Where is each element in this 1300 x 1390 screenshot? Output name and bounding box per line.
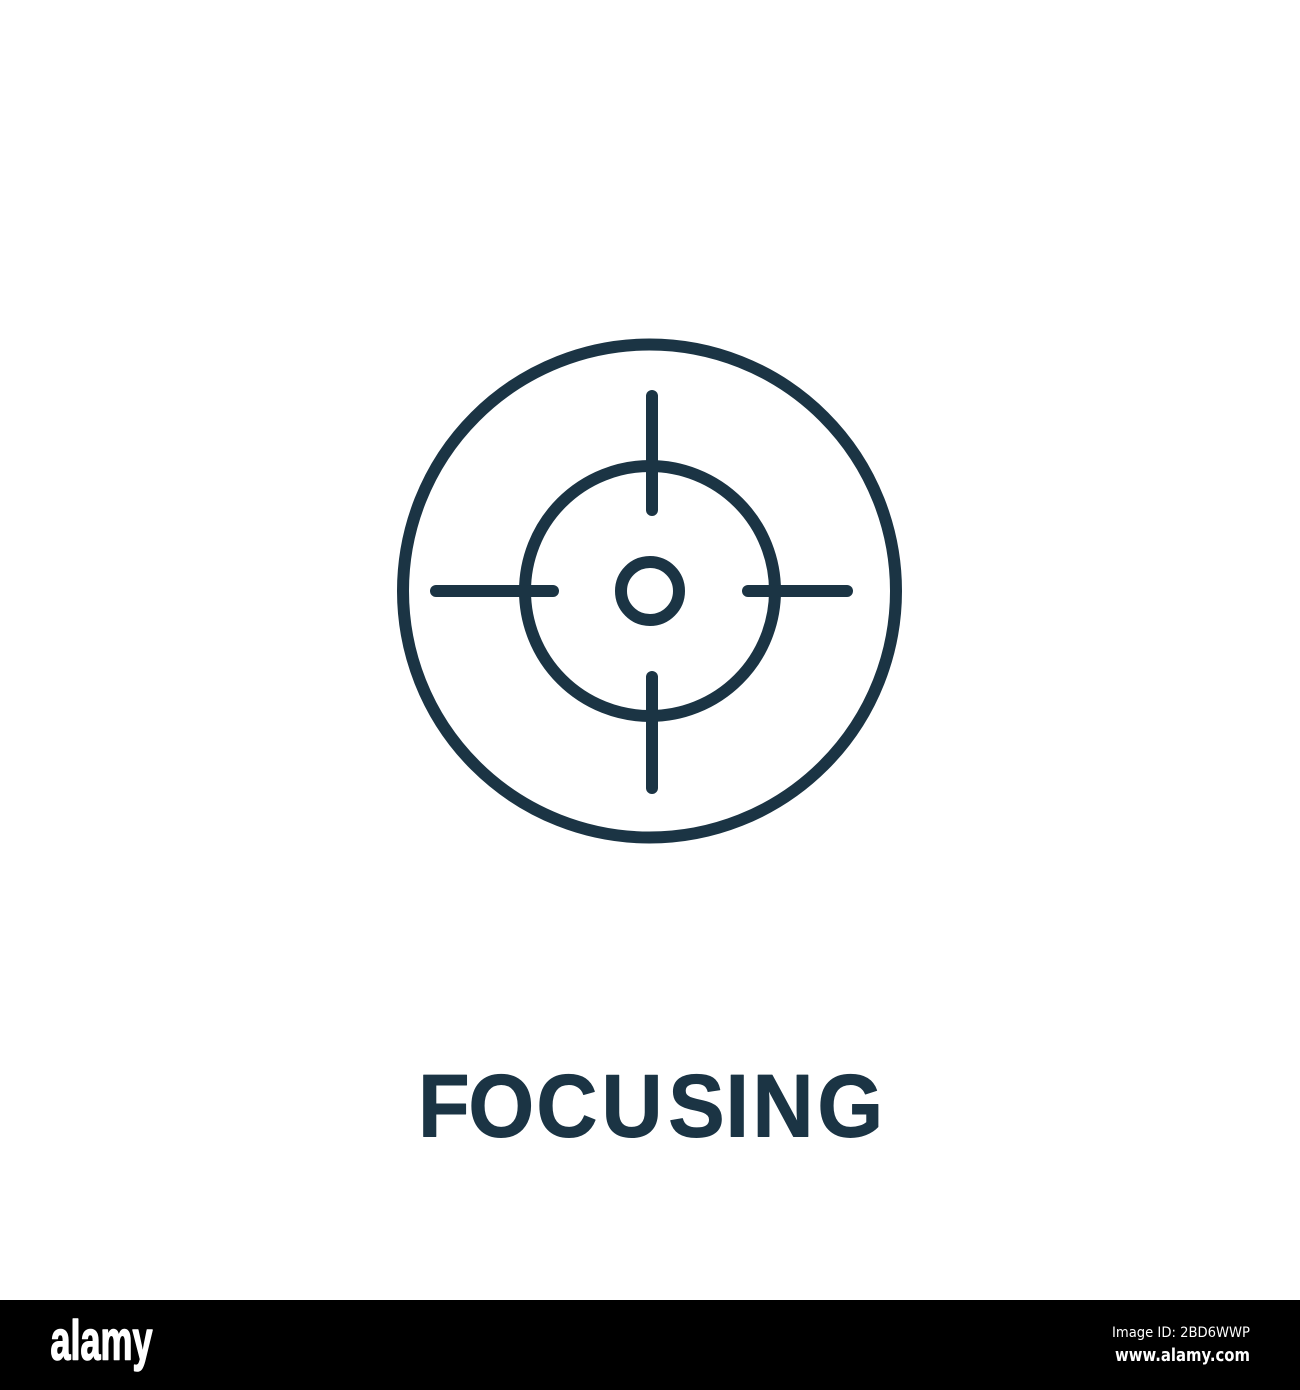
footer bar	[0, 1300, 1300, 1390]
icon: bottom crosshair tick	[646, 677, 658, 788]
icon: center ring	[621, 562, 679, 620]
footer url: www.alamy.com	[1115, 1345, 1250, 1366]
icon: top crosshair tick	[646, 396, 658, 510]
title: FOCUSING	[418, 1057, 883, 1156]
footer image id: Image ID: 2BD6WWP	[1112, 1325, 1250, 1341]
icon: middle circle	[525, 466, 775, 716]
icon: outer circle	[403, 344, 896, 838]
icon: right crosshair tick	[748, 585, 847, 597]
icon: left crosshair tick	[436, 585, 553, 597]
footer logo: alamy: alamy	[50, 1308, 152, 1372]
icon: focusing crosshair target	[403, 344, 896, 838]
